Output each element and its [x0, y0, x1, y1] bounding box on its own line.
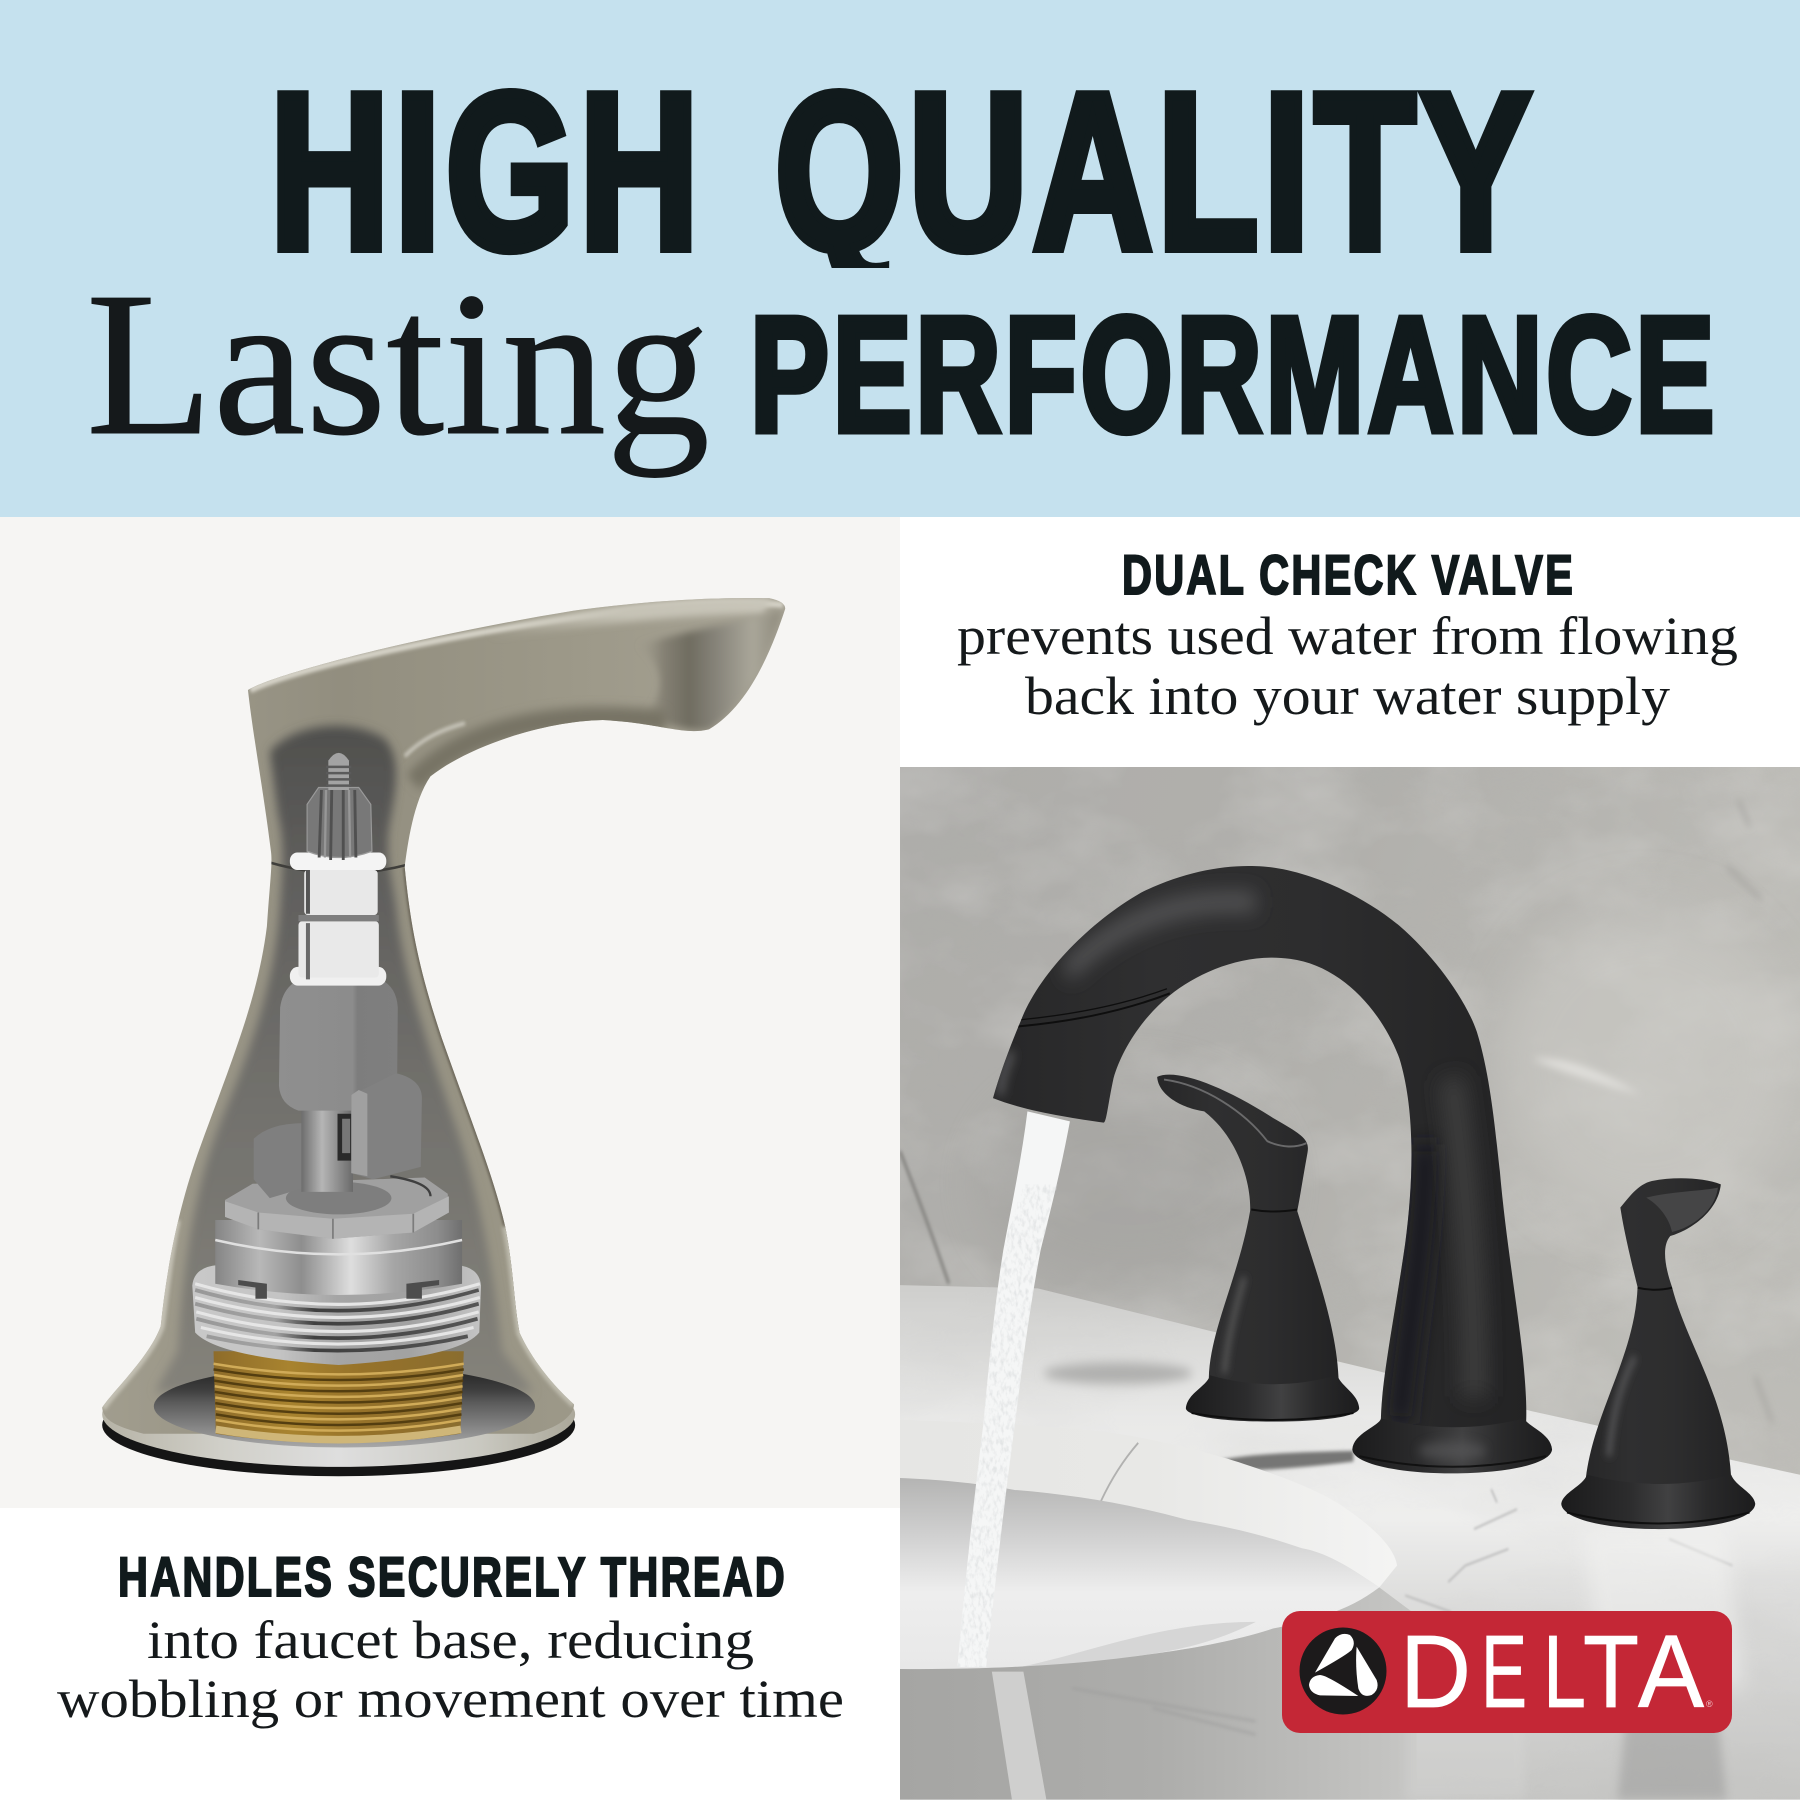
- handle base plate: [102, 1362, 575, 1476]
- water stream: [957, 1111, 1070, 1667]
- cartridge cylinder: [215, 1220, 462, 1299]
- faucet spout: [993, 866, 1526, 1430]
- valve stem: [301, 1108, 354, 1192]
- left lever handle: [1157, 1075, 1359, 1422]
- flange edge shine: [505, 1226, 574, 1404]
- octagonal nut: [225, 1176, 449, 1239]
- caption: handles securely thread: into faucet base, reducing: [147, 1610, 754, 1670]
- threaded collar: [192, 1265, 481, 1365]
- sink basin: [900, 1478, 1379, 1669]
- gray block: [279, 976, 398, 1111]
- cutaway interior: [155, 726, 534, 1392]
- cam block: [351, 1073, 422, 1179]
- spout base: [1352, 1418, 1552, 1473]
- lever underside shade: [413, 718, 666, 782]
- logo: Delta: [1282, 1611, 1732, 1733]
- heading: HIGH QUALITY: [277, 88, 1535, 268]
- header banner: [0, 0, 1800, 517]
- heading: Lasting Performance: [86, 249, 1718, 478]
- counter front reflection: [900, 1529, 1744, 1800]
- wordmark: D: [1400, 1614, 1471, 1729]
- right lever handle: [1561, 1178, 1755, 1529]
- basin shadow: [1024, 1622, 1255, 1666]
- caption: dual check valve: back into your water supply: [1025, 666, 1670, 726]
- caption: handles securely thread: wobbling or movement over time: [57, 1669, 844, 1729]
- wordmark: L: [1543, 1614, 1586, 1729]
- sink rim: [1100, 1442, 1397, 1587]
- wordmark: A: [1638, 1614, 1704, 1729]
- handle metal body: [102, 598, 785, 1434]
- wordmark: T: [1583, 1614, 1639, 1729]
- lever tip scoop: [637, 611, 782, 730]
- white cartridge: [290, 852, 386, 986]
- panel: handle cutaway: [0, 517, 900, 1508]
- caption: dual check valve: DUAL CHECK VALVE: [1122, 543, 1575, 606]
- photo: faucet on marble vanity: [900, 760, 1800, 1800]
- screw tip: [326, 753, 351, 790]
- illustration: cutaway handle: [102, 598, 785, 1476]
- wall: [900, 760, 1800, 1503]
- caption: handles securely thread: HANDLES SECURELY THREAD: [118, 1545, 787, 1608]
- splined shaft: [307, 788, 372, 860]
- caption: dual check valve: prevents used water from flowing: [957, 606, 1738, 666]
- brass threads: [214, 1351, 464, 1443]
- left tab: [254, 1123, 304, 1198]
- caption: dual check valve: [957, 543, 1738, 726]
- heading: HIGH QUALITY: HIGH: [270, 48, 704, 296]
- icon: delta triangle mark: [1300, 1628, 1386, 1714]
- wordmark: E: [1481, 1614, 1527, 1729]
- marble counter: [900, 1285, 1800, 1800]
- heading: HIGH QUALITY: QUALITY: [775, 48, 1536, 296]
- neck seam: [270, 862, 406, 873]
- lever top plane highlight: [250, 603, 783, 690]
- silhouette edge shading: [405, 867, 519, 1332]
- plate recess: [154, 1365, 535, 1448]
- caption: handles securely thread: [57, 1545, 844, 1729]
- heading: Lasting Performance: Lasting: [86, 249, 710, 478]
- logo: Delta: ®: [1706, 1699, 1713, 1709]
